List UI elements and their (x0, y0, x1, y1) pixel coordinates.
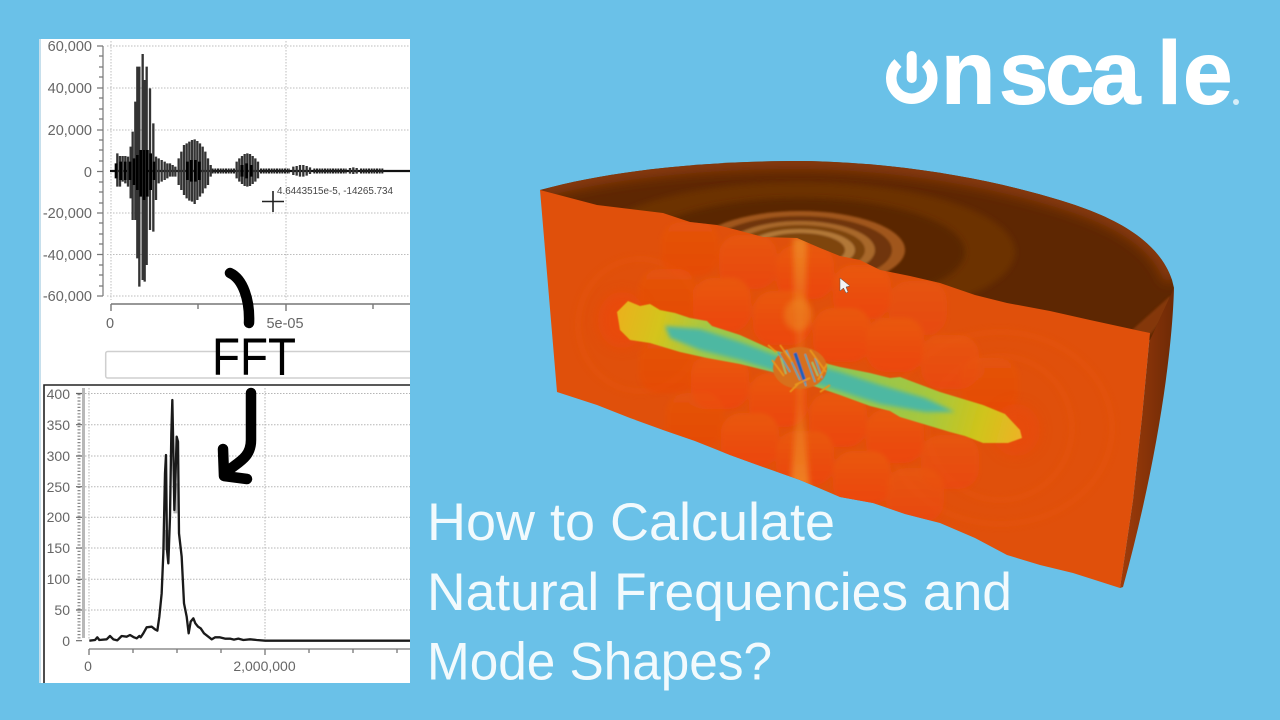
wordmark: nscale (941, 22, 1232, 122)
y axis labels: -40,000 (43, 248, 92, 264)
y axis labels: -60,000 (43, 289, 92, 305)
panel: signal charts (39, 39, 440, 683)
y axis labels: 0 (84, 165, 92, 181)
cursor (840, 278, 850, 293)
chart: time-domain signal (43, 39, 410, 332)
title: Natural Frequencies and (427, 563, 1012, 622)
y axis labels: 300 (47, 448, 70, 464)
y axis labels: 200 (47, 509, 70, 525)
empty input box (106, 352, 426, 378)
wave cells (665, 222, 976, 522)
faint rings around crack tips (578, 259, 1112, 524)
cursor crosshair (262, 191, 284, 212)
x axis labels: 0 (84, 658, 92, 674)
x axis labels (106, 316, 304, 332)
fracture centre (768, 345, 830, 392)
central vertical streak (790, 238, 810, 495)
y axis labels (47, 386, 70, 649)
central crack stripe (617, 301, 1022, 443)
waveform (110, 54, 410, 287)
x axis labels: 5e-05 (266, 316, 304, 332)
y axis labels (43, 39, 92, 305)
3D simulation block (530, 150, 1190, 600)
y axis labels: 0 (62, 633, 70, 649)
interior surface with rings (540, 161, 1174, 340)
y axis labels: 60,000 (48, 39, 92, 55)
icon: power symbol (891, 56, 932, 99)
arrow: FFT label to spectrum (223, 393, 251, 479)
front cut face (530, 180, 1170, 600)
title (427, 493, 1012, 692)
chart: FFT spectrum (44, 385, 410, 683)
arrow: signal to FFT label (230, 273, 249, 323)
title: How to Calculate (427, 493, 835, 552)
title: Mode Shapes? (427, 632, 772, 692)
y axis labels: 40,000 (48, 81, 92, 97)
y axis labels: 100 (47, 571, 70, 587)
logo: onscale (891, 22, 1239, 122)
spectrum curve (89, 400, 410, 641)
cursor readout: 4.6443515e-5, -14265.734 (277, 186, 393, 197)
crack glow (608, 302, 626, 338)
x axis labels: 2,000,000 (233, 658, 296, 674)
y axis labels: -20,000 (43, 206, 92, 222)
y axis labels: 250 (47, 479, 70, 495)
y axis labels: 50 (54, 602, 70, 618)
y axis labels: 400 (47, 386, 70, 402)
label: FFT: FFT (212, 328, 296, 387)
x axis labels (84, 658, 296, 674)
registered mark (1233, 99, 1239, 105)
y axis labels: 350 (47, 417, 70, 433)
right side face (1120, 288, 1174, 588)
x axis labels: 0 (106, 316, 114, 332)
y axis labels: 20,000 (48, 123, 92, 139)
y axis labels: 150 (47, 540, 70, 556)
